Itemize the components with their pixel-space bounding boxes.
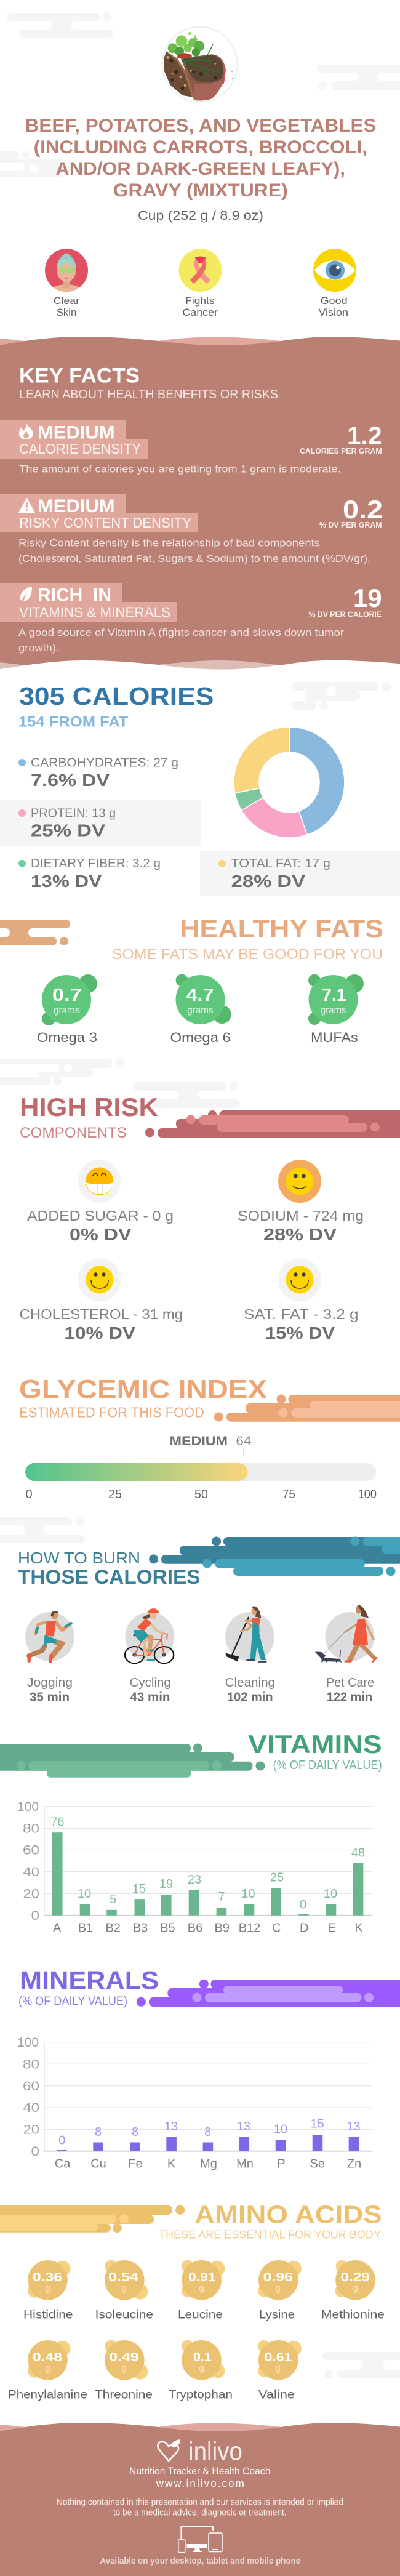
amino: lysine: g (275, 2283, 281, 2293)
vitamins bar chart: B3 (133, 1921, 148, 1935)
amino: histidine: 0.36 (33, 2271, 62, 2284)
mufas badge (308, 974, 364, 1045)
vitamins bar chart: A (53, 1921, 62, 1935)
panel: how to burn those calories (18, 1536, 400, 1704)
amino: leucine (178, 2260, 225, 2322)
amino: leucine: Leucine (178, 2309, 223, 2322)
decorative band: minerals (137, 1980, 400, 2007)
activity labels (27, 1676, 374, 1704)
mufas badge: 7.1 (322, 985, 346, 1005)
legend: total fat: 28% DV (231, 872, 305, 891)
glycemic value: 64 (236, 1434, 252, 1448)
amino: valine: g (275, 2363, 281, 2373)
disclaimer: to be a medical advice, diagnosis or treatment. (113, 2508, 287, 2518)
fact: vitamins and minerals: VITAMINS & MINERALS (19, 604, 170, 620)
panel: minerals (17, 1966, 400, 2171)
amino acids subheading: THESE ARE ESSENTIAL FOR YOUR BODY (159, 2229, 381, 2241)
legend: total fat: TOTAL FAT: 17 g (231, 857, 330, 870)
saturated fat item: SAT. FAT - 3.2 g (244, 1306, 358, 1322)
fact: vitamins and minerals: 19 (353, 584, 382, 612)
amino: histidine: Histidine (23, 2309, 73, 2322)
glycemic value: MEDIUM (170, 1434, 228, 1448)
legend: dietary fiber (18, 857, 161, 891)
vitamins bar chart: B9 (214, 1921, 230, 1935)
minerals bar chart: Ca (55, 2157, 71, 2171)
vitamins bar chart: 0 (31, 1909, 39, 1923)
fact: vitamins and minerals: RICH IN (38, 585, 111, 606)
benefit labels: Fights (185, 295, 214, 307)
amino: tryptophan: 0.1 (193, 2351, 212, 2364)
vitamins bar chart: D (300, 1921, 308, 1935)
amino: histidine (23, 2260, 73, 2322)
gauge scale: 100 (358, 1488, 377, 1501)
omega 3 badge: 0.7 (52, 985, 82, 1005)
title: BEEF, POTATOES, AND VEGETABLES (25, 116, 377, 136)
minerals bar chart: 13 (237, 2120, 250, 2133)
mufas badge: grams (321, 1005, 346, 1016)
fact: vitamins and minerals (0, 583, 382, 654)
minerals bar chart: 60 (23, 2079, 39, 2093)
amino: valine (258, 2340, 302, 2402)
minerals bar chart: 0 (31, 2145, 39, 2159)
minerals bar chart: 80 (23, 2057, 39, 2072)
glycemic value (170, 1434, 252, 1456)
fact: vitamins and minerals: A good source of Vitamin A (fights cancer and slows down tumor (18, 627, 344, 638)
fact: calorie density (0, 420, 382, 475)
minerals bar chart: 10 (274, 2123, 287, 2137)
vitamins bar chart: 5 (110, 1893, 116, 1906)
omega 6 badge: grams (187, 1005, 214, 1016)
mufas badge: MUFAs (311, 1030, 358, 1045)
vitamins bar chart: 10 (78, 1887, 91, 1901)
vitamins bar chart: 10 (324, 1887, 337, 1901)
amino: isoleucine: g (121, 2283, 127, 2293)
amino: threonine: 0.49 (109, 2351, 139, 2364)
legend: protein: PROTEIN: 13 g (31, 807, 116, 821)
activity labels: 43 min (130, 1690, 170, 1704)
minerals bar chart: 15 (311, 2117, 324, 2131)
benefit labels: Vision (318, 307, 348, 318)
legend: carbohydrates: 7.6% DV (31, 771, 110, 790)
activity labels: 35 min (30, 1690, 70, 1704)
vitamins bar chart: 48 (351, 1847, 365, 1860)
vitamins bar chart: B5 (160, 1921, 175, 1935)
amino: phenylalanine: 0.48 (33, 2351, 62, 2364)
activity labels: Pet Care (326, 1676, 374, 1690)
fact: risky content density (0, 494, 383, 564)
fact: risky content density: (Cholesterol, Saturated Fat, Sugars & Sodium) to the amount (%DV/gr). (18, 553, 370, 564)
key facts heading: LEARN ABOUT HEALTH BENEFITS OR RISKS (19, 388, 278, 401)
amino: isoleucine: 0.54 (108, 2271, 139, 2284)
minerals bar chart: 100 (17, 2036, 39, 2050)
activity labels: Jogging (27, 1676, 73, 1690)
decorative band: vitamins (0, 1743, 265, 1778)
high risk heading: HIGH RISK (20, 1093, 158, 1121)
amino: tryptophan (169, 2340, 233, 2402)
legend: protein (0, 800, 201, 846)
vitamins bar chart: B6 (188, 1921, 202, 1935)
fact: calorie density: The amount of calories you are getting from 1 gram is moderate. (19, 463, 341, 475)
vitamins bar chart: B2 (105, 1921, 121, 1935)
title: AND/OR DARK-GREEN LEAFY), (55, 159, 345, 179)
amino: phenylalanine: g (45, 2363, 50, 2373)
minerals bar chart: Mg (200, 2157, 217, 2171)
benefit: good vision (313, 249, 356, 292)
activity labels: Cycling (130, 1676, 171, 1690)
minerals bar chart: Mn (236, 2157, 254, 2171)
burn heading line 1: HOW TO BURN (18, 1549, 140, 1567)
decorative band: amino acids (0, 2205, 185, 2233)
vitamins bar chart: 23 (188, 1873, 201, 1887)
gauge scale (26, 1488, 377, 1501)
minerals bar chart: 20 (23, 2122, 39, 2137)
panel: vitamins (0, 1730, 382, 1935)
panel: amino acids (0, 2201, 385, 2402)
omega 6 badge: Omega 6 (170, 1030, 231, 1045)
minerals bar chart: Se (310, 2157, 325, 2171)
omega 6 badge: 4.7 (186, 985, 214, 1005)
gauge scale: 75 (282, 1488, 295, 1501)
omega 3 badge: Omega 3 (37, 1030, 97, 1045)
vitamins bar chart: E (327, 1921, 336, 1935)
glycemic gauge (25, 1463, 376, 1481)
activity: cycling (125, 1608, 174, 1663)
panel: healthy fats (0, 914, 383, 1045)
serving size: Cup (252 g / 8.9 oz) (138, 209, 263, 223)
amino: isoleucine (95, 2260, 153, 2322)
sodium item: SODIUM - 724 mg (238, 1208, 364, 1224)
title (25, 116, 377, 201)
fact: calorie density: MEDIUM (38, 422, 115, 443)
cholesterol item (20, 1258, 183, 1342)
amino: phenylalanine (8, 2340, 87, 2402)
sodium item (238, 1160, 364, 1244)
vitamins heading: VITAMINS (248, 1730, 382, 1759)
amino: lysine (258, 2260, 302, 2322)
fact: calorie density: CALORIES PER GRAM (300, 446, 382, 455)
amino: methionine: Methionine (321, 2309, 385, 2322)
added sugar item (27, 1160, 174, 1244)
legend: carbohydrates: CARBOHYDRATES: 27 g (31, 756, 178, 770)
vitamins bar chart: B1 (78, 1921, 93, 1935)
activity labels: 102 min (227, 1690, 273, 1704)
vitamins bar chart: K (354, 1921, 363, 1935)
decorative band: healthy fats (0, 920, 71, 945)
amino: lysine: 0.96 (263, 2271, 293, 2284)
panel: calories (0, 682, 400, 896)
fact: risky content density: MEDIUM (38, 496, 115, 516)
vitamins bar chart: 0 (300, 1898, 306, 1912)
minerals bar chart: 40 (23, 2101, 39, 2115)
amino: lysine: Lysine (259, 2309, 295, 2322)
vitamins bar chart: 10 (241, 1887, 255, 1901)
sodium item: 28% DV (263, 1225, 337, 1244)
minerals bar chart: 0 (58, 2133, 65, 2147)
amino: leucine: g (199, 2283, 204, 2293)
benefit labels: Clear (54, 295, 79, 307)
calories from fat: 154 FROM FAT (18, 714, 129, 731)
benefit labels: Cancer (182, 307, 218, 318)
vitamins subheading: (% OF DAILY VALUE) (273, 1759, 382, 1772)
benefit: clear skin (45, 249, 88, 292)
minerals bar chart: 8 (204, 2125, 211, 2139)
minerals subheading: (% OF DAILY VALUE) (18, 1995, 127, 2008)
high risk subheading: COMPONENTS (20, 1125, 127, 1141)
panel: high risk components (20, 1093, 400, 1342)
calories heading: 305 CALORIES (19, 682, 214, 710)
cholesterol item: CHOLESTEROL - 31 mg (20, 1306, 183, 1322)
title: GRAVY (MIXTURE) (113, 180, 288, 201)
amino: histidine: g (45, 2283, 50, 2293)
activity: pet care (316, 1605, 377, 1662)
saturated fat item: 15% DV (265, 1323, 335, 1342)
minerals bar chart: K (167, 2157, 176, 2171)
key facts heading (19, 364, 278, 401)
healthy fats heading: HEALTHY FATS (180, 914, 383, 943)
vitamins bar chart: 80 (23, 1822, 39, 1836)
minerals bar chart: Fe (128, 2157, 143, 2171)
amino: threonine: Threonine (95, 2389, 153, 2402)
donut chart (234, 727, 345, 838)
fact: risky content density: % DV PER GRAM (319, 520, 382, 529)
decorative band: high risk (145, 1110, 400, 1138)
amino: phenylalanine: Phenylalanine (8, 2389, 87, 2402)
decorative band: burn (149, 1536, 400, 1576)
benefit: fights cancer (178, 249, 222, 292)
vitamins bar chart: B12 (239, 1921, 260, 1935)
minerals bar chart (17, 2036, 372, 2171)
amino: isoleucine: Isoleucine (95, 2309, 153, 2322)
benefit labels: Good (321, 295, 348, 307)
availability note: Available on your desktop, tablet and mobile phone (100, 2556, 300, 2566)
activity: jogging (25, 1611, 74, 1662)
minerals bar chart: 8 (132, 2125, 138, 2139)
activity labels: 122 min (327, 1690, 372, 1704)
vitamins bar chart: 20 (23, 1887, 39, 1901)
vitamins bar chart: 76 (50, 1816, 64, 1829)
amino: tryptophan: g (199, 2363, 204, 2373)
amino: threonine: g (121, 2363, 127, 2373)
vitamins bar chart: 25 (270, 1871, 284, 1885)
minerals bar chart: P (277, 2157, 286, 2171)
amino: tryptophan: Tryptophan (169, 2389, 233, 2402)
icon: devices (178, 2526, 222, 2553)
minerals heading: MINERALS (20, 1966, 159, 1995)
amino acids heading: AMINO ACIDS (194, 2201, 382, 2229)
fact: vitamins and minerals: growth). (18, 642, 59, 654)
fact: calorie density: 1.2 (347, 421, 382, 450)
website link: www.inlivo.com (156, 2478, 244, 2489)
vitamins bar chart: 7 (218, 1890, 225, 1903)
saturated fat item (244, 1258, 358, 1342)
glycemic subheading: ESTIMATED FOR THIS FOOD (19, 1405, 204, 1421)
fact: vitamins and minerals: % DV PER CALORIE (309, 609, 382, 619)
omega 3 badge (37, 974, 97, 1045)
inlivo logo: inlivo (188, 2437, 242, 2466)
omega 3 badge: grams (54, 1005, 79, 1016)
activity: cleaning (225, 1606, 274, 1661)
disclaimer: Nothing contained in this presentation and our services is intended or implied (57, 2497, 343, 2507)
amino: valine: Valine (258, 2389, 295, 2402)
amino: methionine: g (353, 2283, 358, 2293)
amino: valine: 0.61 (265, 2351, 292, 2364)
added sugar item: ADDED SUGAR - 0 g (27, 1208, 174, 1224)
disclaimer (57, 2497, 343, 2518)
fact: risky content density: 0.2 (343, 495, 383, 524)
inlivo logo (158, 2437, 242, 2466)
title: (INCLUDING CARROTS, BROCCOLI, (34, 137, 367, 158)
vitamins bar chart: 19 (159, 1877, 173, 1891)
gauge scale: 50 (194, 1488, 208, 1501)
fact: calorie density: CALORIE DENSITY (19, 441, 141, 457)
legend: total fat (200, 851, 400, 896)
header: food photo (162, 27, 238, 102)
panel: key facts (0, 337, 400, 670)
fact: risky content density: Risky Content density is the relationship of bad components (18, 537, 320, 549)
vitamins bar chart (17, 1800, 372, 1935)
panel: footer (0, 2423, 400, 2576)
benefit labels (54, 295, 348, 318)
key facts heading: KEY FACTS (19, 364, 140, 387)
gauge scale: 25 (108, 1488, 122, 1501)
legend: dietary fiber: 13% DV (31, 872, 102, 891)
glycemic heading: GLYCEMIC INDEX (19, 1375, 267, 1405)
amino: leucine: 0.91 (188, 2271, 216, 2284)
amino: methionine: 0.29 (341, 2271, 370, 2284)
vitamins bar chart: C (272, 1921, 281, 1935)
vitamins bar chart: 60 (23, 1843, 39, 1858)
healthy fats subheading: SOME FATS MAY BE GOOD FOR YOU (112, 946, 383, 963)
minerals bar chart: Cu (90, 2157, 106, 2171)
benefit labels: Skin (57, 307, 76, 318)
decorative band: glycemic (214, 1395, 400, 1422)
amino: methionine (321, 2260, 385, 2322)
added sugar item: 0% DV (70, 1225, 132, 1244)
activity labels: Cleaning (225, 1676, 275, 1690)
legend: dietary fiber: DIETARY FIBER: 3.2 g (31, 857, 161, 870)
gauge scale: 0 (26, 1488, 33, 1501)
minerals bar chart: Zn (347, 2157, 361, 2171)
burn heading line 2: THOSE CALORIES (18, 1566, 201, 1588)
legend: carbohydrates (18, 756, 178, 790)
cholesterol item: 10% DV (64, 1323, 135, 1342)
omega 6 badge (170, 974, 231, 1045)
minerals bar chart: 13 (346, 2120, 361, 2133)
legend: protein: 25% DV (31, 821, 105, 840)
fact: risky content density: RISKY CONTENT DENSITY (19, 515, 191, 531)
tagline: Nutrition Tracker & Health Coach (129, 2465, 271, 2477)
vitamins bar chart: 40 (23, 1865, 39, 1879)
vitamins bar chart: 15 (132, 1882, 146, 1896)
vitamins bar chart: 100 (17, 1800, 39, 1814)
amino: threonine (95, 2340, 153, 2402)
minerals bar chart: 8 (95, 2125, 102, 2139)
panel: glycemic index (19, 1375, 400, 1501)
minerals bar chart: 13 (164, 2120, 178, 2133)
